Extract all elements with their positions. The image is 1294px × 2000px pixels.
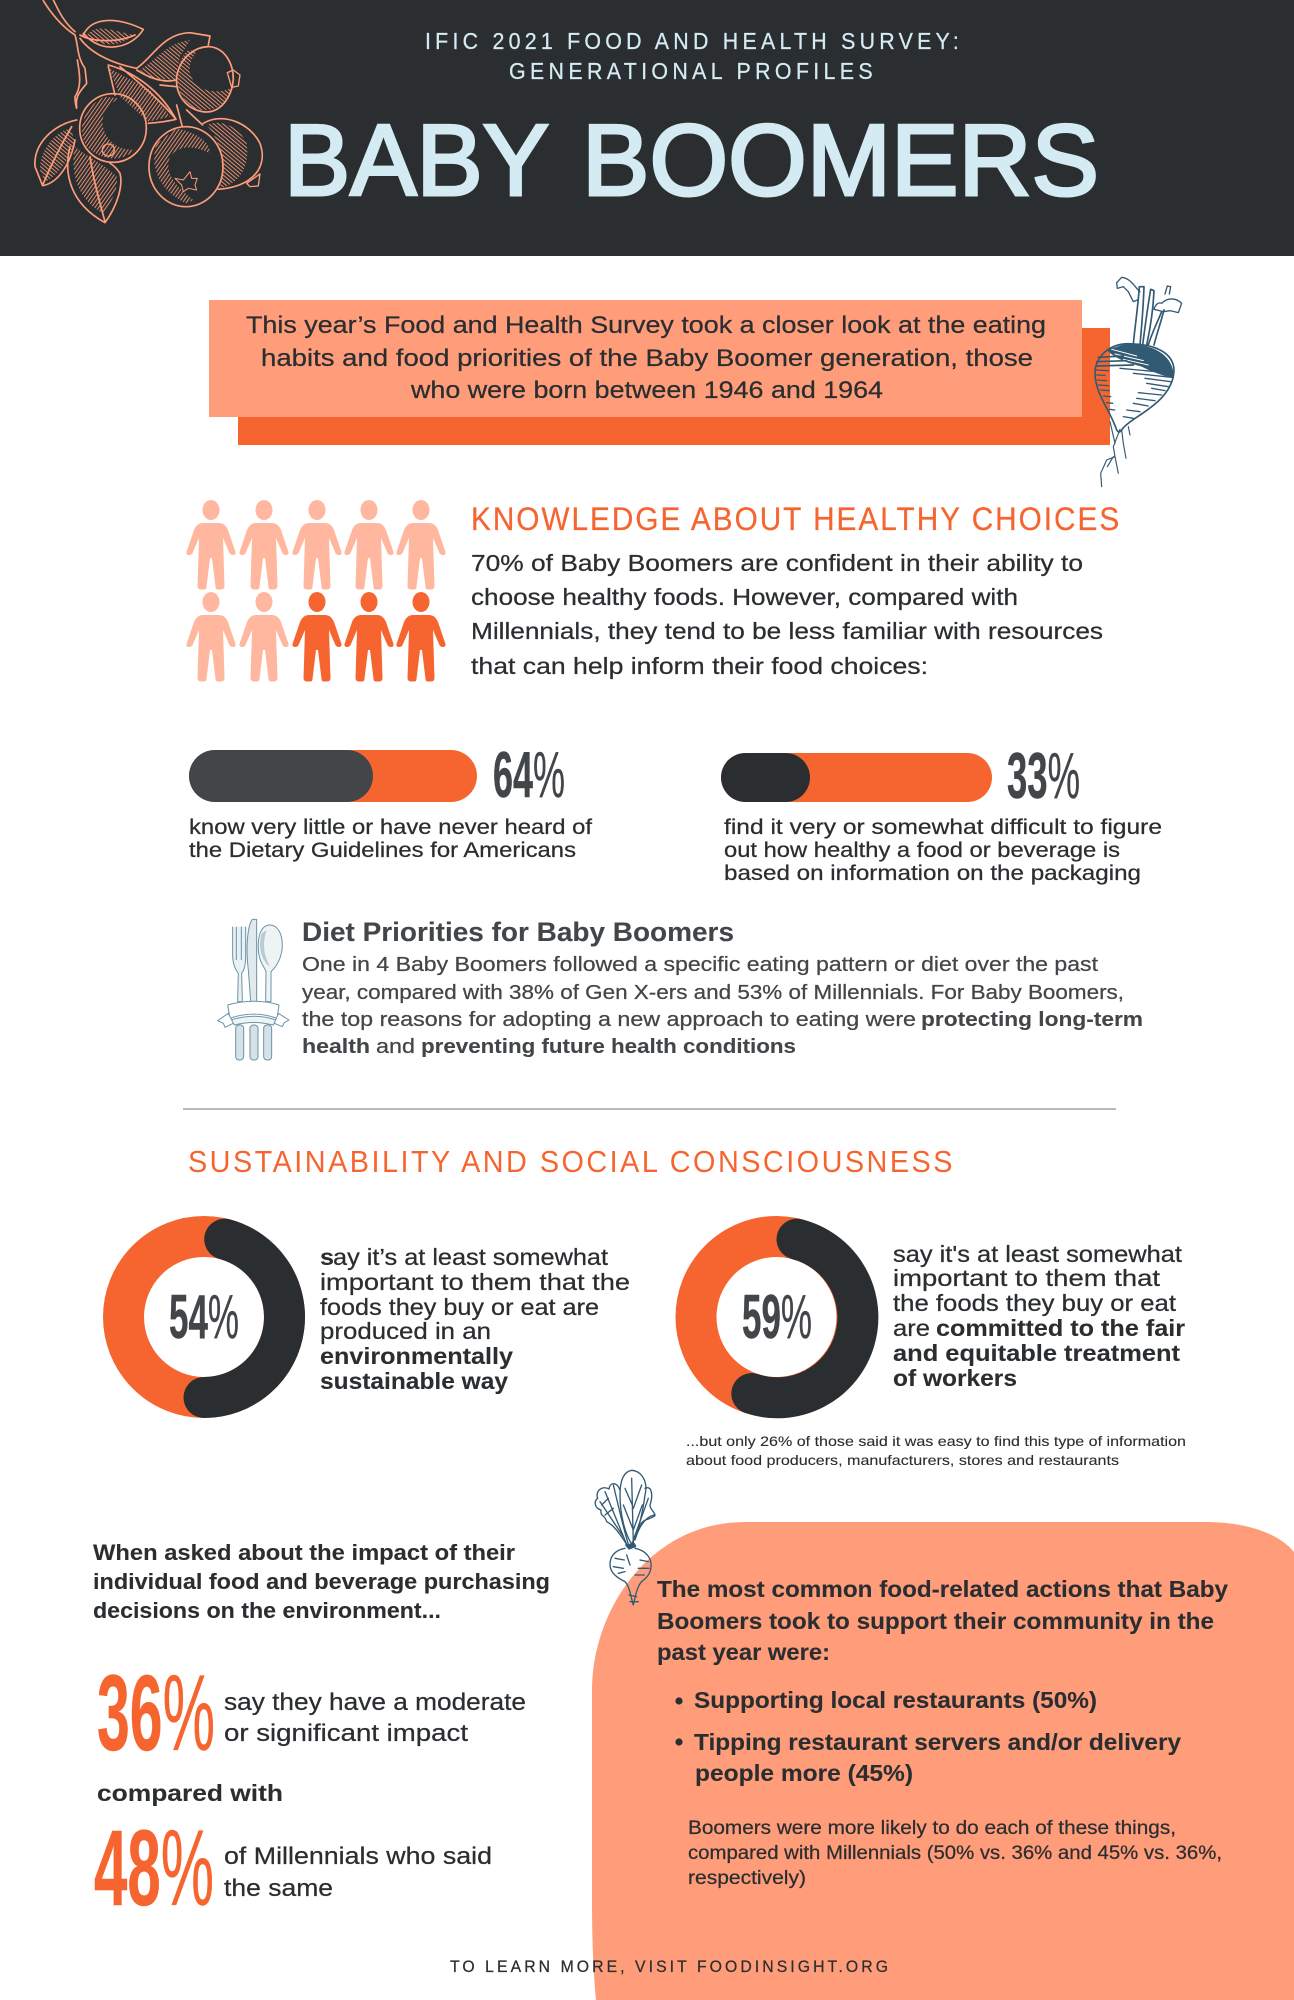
caption: 64 percent xyxy=(189,816,592,862)
text block: 54 percent: environmentally xyxy=(320,1343,513,1369)
text block: diet priorities: preventing future health conditions xyxy=(421,1035,796,1058)
text block: community actions xyxy=(657,1576,1228,1889)
text block: 54 percent: foods they buy or eat are xyxy=(320,1294,599,1320)
caption: 64 percent: the Dietary Guidelines for Americans xyxy=(189,839,576,862)
comparison note: compared with Millennials (50% vs. 36% and 45% vs. 36%, xyxy=(688,1843,1222,1864)
text block: impact question: decisions on the environment... xyxy=(93,1598,441,1623)
donut chart 54 percent xyxy=(124,1236,285,1398)
number: 64 percent: 64% xyxy=(493,738,565,811)
footer: TO LEARN MORE, VISIT FOODINSIGHT.ORG xyxy=(450,1958,888,1976)
progress bar 64 percent xyxy=(189,750,477,802)
number: 48 percent: 48% xyxy=(94,1807,214,1928)
comparison note: respectively) xyxy=(688,1868,806,1889)
comparison note: Boomers were more likely to do each of these things, xyxy=(688,1818,1176,1839)
header band xyxy=(0,0,1294,256)
panel: community actions background xyxy=(592,1522,1294,2000)
text block: community actions: The most common food-related actions that Baby xyxy=(657,1576,1228,1602)
text: 36 percent description: say they have a moderate xyxy=(224,1689,526,1716)
number: 36 percent: 36% xyxy=(97,1652,215,1773)
text block: 54 percent: ay it’s at least somewhat xyxy=(333,1244,609,1270)
text block: community actions: past year were: xyxy=(657,1639,830,1665)
text block: diet priorities: year, compared with 38% of Gen X-ers and 53% of Millennials. For Baby Boomers, xyxy=(302,981,1124,1004)
header subtitle xyxy=(425,28,959,84)
donut chart 54 percent: 54% xyxy=(169,1283,239,1352)
heading: sustainability: SUSTAINABILITY AND SOCIAL CONSCIOUSNESS xyxy=(188,1145,952,1179)
text block: knowledge xyxy=(471,550,1103,679)
intro callout: This year’s Food and Health Survey took a closer look at the eating xyxy=(246,312,1046,339)
text block: 54 percent: produced in an xyxy=(320,1318,491,1344)
heading: diet priorities: Diet Priorities for Baby Boomers xyxy=(302,917,734,947)
footnote: ...but only 26% of those said it was easy to find this type of information xyxy=(686,1433,1186,1449)
text block: 54 percent: important to them that the xyxy=(320,1269,630,1295)
illustration: cutlery with ribbon xyxy=(218,919,289,1060)
intro callout xyxy=(209,300,1110,445)
text block: 54 percent xyxy=(320,1244,630,1394)
text block: 59 percent: and equitable treatment xyxy=(893,1340,1180,1366)
illustration: beet xyxy=(1095,277,1182,487)
text block: diet priorities: protecting long-term xyxy=(921,1008,1143,1031)
intro callout: habits and food priorities of the Baby Boomer generation, those xyxy=(261,345,1033,372)
caption: 33 percent: out how healthy a food or beverage is xyxy=(724,839,1120,862)
text: 36 percent description: or significant impact xyxy=(224,1720,468,1747)
intro callout: who were born between 1946 and 1964 xyxy=(410,377,883,404)
header subtitle: GENERATIONAL PROFILES xyxy=(509,58,873,84)
text block: 59 percent: say it's at least somewhat xyxy=(893,1241,1183,1267)
bullet list xyxy=(675,1687,1181,1786)
header subtitle: IFIC 2021 FOOD AND HEALTH SURVEY: xyxy=(425,28,959,54)
progress bar 33 percent xyxy=(721,753,992,802)
caption: 33 percent: find it very or somewhat difficult to figure xyxy=(724,816,1162,839)
footnote: about food producers, manufacturers, stores and restaurants xyxy=(686,1452,1119,1468)
title: BOOMERS xyxy=(582,105,1099,217)
number: 33 percent: 33% xyxy=(1007,739,1080,812)
text: 48 percent description: of Millennials who said xyxy=(224,1843,492,1870)
text block: knowledge: choose healthy foods. However, compared with xyxy=(471,584,1018,610)
text block: impact question: individual food and beverage purchasing xyxy=(93,1569,550,1594)
donut chart 59 percent: 59% xyxy=(742,1283,812,1352)
caption: 64 percent: know very little or have never heard of xyxy=(189,816,592,839)
text block: diet priorities: health xyxy=(302,1035,370,1058)
text: 48 percent description: the same xyxy=(224,1875,333,1902)
text block: 59 percent: the foods they buy or eat xyxy=(893,1290,1177,1316)
text block: 54 percent: sustainable way xyxy=(320,1368,508,1394)
bullet list: Supporting local restaurants (50%) xyxy=(694,1687,1097,1713)
illustration: small beet with leaves xyxy=(595,1470,655,1605)
bullet list: people more (45%) xyxy=(695,1760,913,1786)
text block: knowledge: Millennials, they tend to be less familiar with resources xyxy=(471,618,1103,644)
caption: 33 percent: based on information on the packaging xyxy=(724,862,1141,885)
text block: 59 percent: important to them that xyxy=(893,1265,1161,1291)
text block: impact question xyxy=(93,1540,550,1623)
text block: 59 percent xyxy=(893,1241,1185,1391)
text block: diet priorities: and xyxy=(376,1035,415,1058)
text: compared with: compared with xyxy=(97,1780,283,1806)
text block: community actions: Boomers took to support their community in the xyxy=(657,1608,1214,1634)
donut chart 59 percent xyxy=(696,1236,858,1398)
text block: diet priorities: One in 4 Baby Boomers followed a specific eating pattern or diet over the past xyxy=(302,953,1098,976)
comparison note xyxy=(688,1818,1222,1889)
title: BABY xyxy=(284,105,549,217)
text block: 59 percent: committed to the fair xyxy=(936,1315,1185,1341)
icon group: ten people, 70 percent highlighted xyxy=(186,500,446,682)
footnote xyxy=(686,1433,1186,1468)
caption: 33 percent xyxy=(724,816,1162,885)
text block: knowledge: that can help inform their food choices: xyxy=(471,653,928,679)
text block: impact question: When asked about the impact of their xyxy=(93,1540,515,1565)
text block: 59 percent: of workers xyxy=(893,1365,1017,1391)
text block: diet priorities xyxy=(302,953,1143,1058)
text: 36 percent description xyxy=(224,1689,526,1747)
text block: diet priorities: the top reasons for adopting a new approach to eating were xyxy=(302,1008,916,1031)
title xyxy=(284,105,1099,217)
text block: 54 percent: s xyxy=(320,1244,334,1270)
text block: knowledge: 70% of Baby Boomers are confident in their ability to xyxy=(471,550,1083,576)
text block: 59 percent: are xyxy=(893,1315,930,1341)
heading: knowledge about healthy choices: KNOWLEDGE ABOUT HEALTHY CHOICES xyxy=(471,501,1119,537)
text: 48 percent description xyxy=(224,1843,492,1902)
bullet list: Tipping restaurant servers and/or delivery xyxy=(694,1729,1181,1755)
illustration: berries branch xyxy=(35,0,262,223)
